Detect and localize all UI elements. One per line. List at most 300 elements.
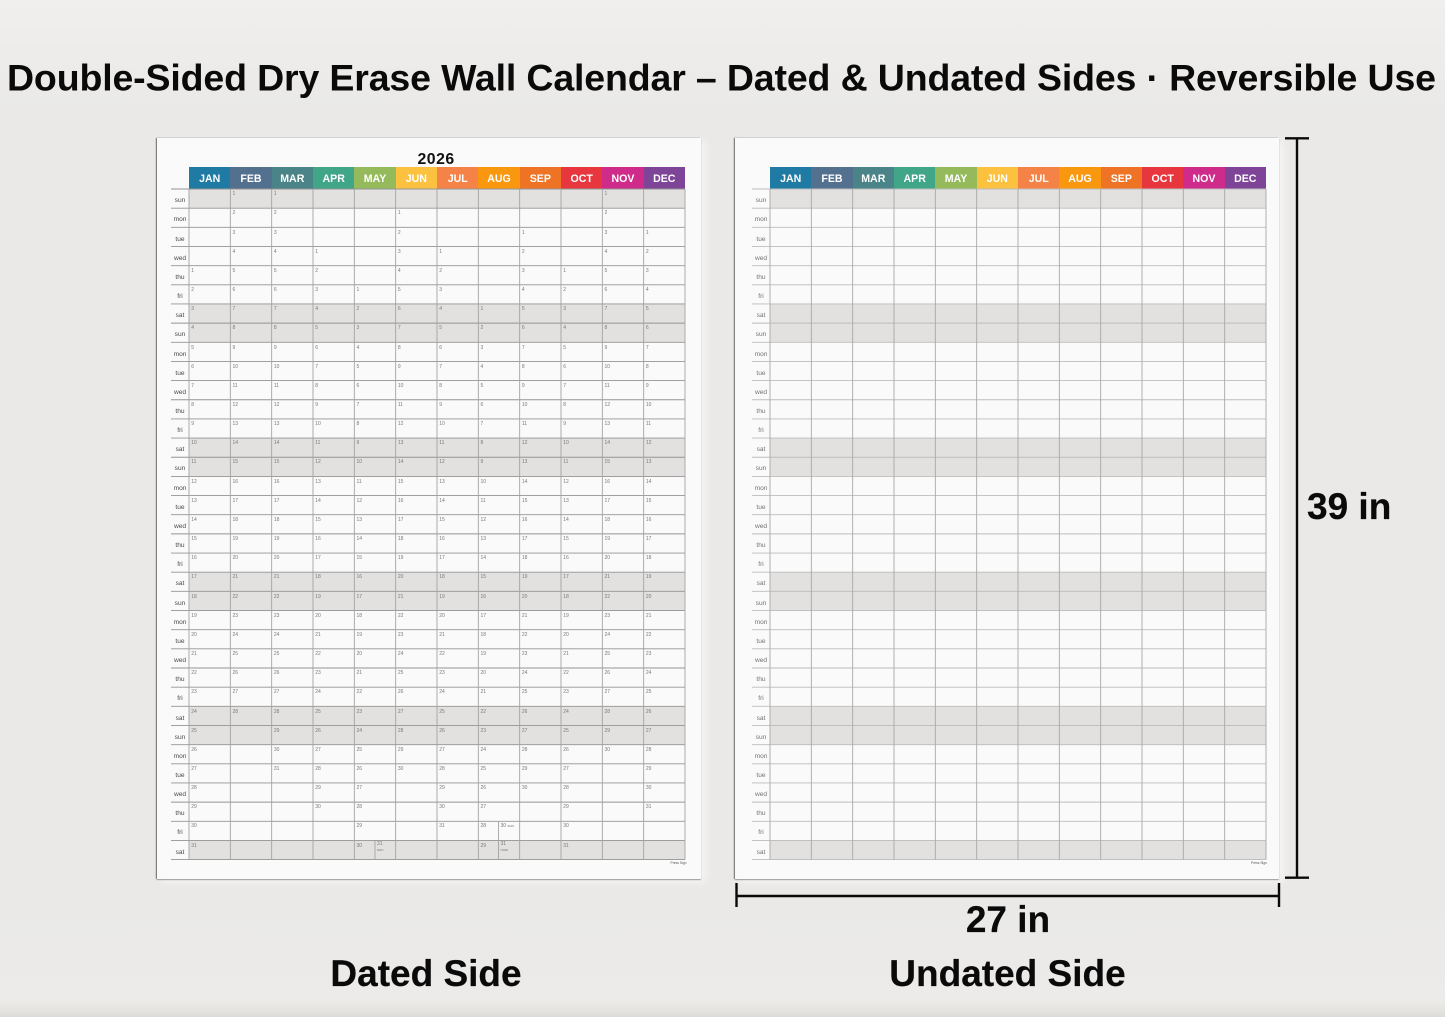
weekday labels: thu: [756, 542, 766, 549]
dates: March: 7: [274, 306, 277, 312]
caption: undated side: Undated Side: [889, 953, 1126, 994]
dates: August: 23: [481, 728, 486, 734]
weekday labels: wed: [755, 389, 767, 396]
weekday labels: sat: [757, 849, 765, 856]
dates: March: 26: [274, 670, 279, 676]
dates: April: 27: [315, 747, 321, 753]
dates: November: 21: [605, 574, 610, 580]
dates: January: 2: [191, 287, 194, 293]
weekday labels: sun: [756, 331, 766, 338]
dates: August: 27: [481, 804, 486, 810]
dates: December: 14: [646, 479, 651, 485]
panel: dated side calendar: [156, 138, 700, 879]
dates: February: 20: [233, 555, 238, 561]
dates: January: 14: [191, 517, 197, 523]
dates: July: 31: [439, 823, 445, 829]
dates: November: 12: [605, 402, 610, 408]
dates: October: 30: [563, 823, 569, 829]
dates: March: 8: [274, 325, 277, 331]
weekday labels: wed: [755, 657, 767, 664]
dates: October: 22: [563, 670, 569, 676]
dates: August: 9: [481, 459, 483, 465]
dates: February: 23: [233, 613, 238, 619]
dates: May: 16: [357, 574, 362, 580]
weekday labels: sat: [757, 312, 765, 319]
dates: May: 14: [357, 536, 362, 542]
dates: August: 22: [481, 709, 486, 715]
dates: May: 21: [357, 670, 362, 676]
dates: November: 3: [605, 230, 607, 236]
dates: July: 21: [439, 632, 445, 638]
dates: July: 9: [439, 402, 442, 408]
dates: July: 19: [439, 594, 445, 600]
dates: September: 5: [522, 306, 525, 312]
split date: August 31 mon: mon: [500, 847, 508, 852]
dates: September: 23: [522, 651, 527, 657]
dates: August: 20: [481, 670, 486, 676]
dates: March: 5: [274, 268, 277, 274]
dates: September: 2: [522, 249, 525, 255]
dates: October: 21: [563, 651, 569, 657]
dates: June: 9: [398, 364, 401, 370]
dates: April: 9: [315, 402, 318, 408]
dates: February: 25: [233, 651, 238, 657]
dates: June: 17: [398, 517, 403, 523]
weekday labels: tue: [756, 638, 766, 645]
dates: April: 5: [315, 325, 318, 331]
dates: August: 15: [481, 574, 486, 580]
dates: January: [191, 268, 197, 849]
dates: September: 15: [522, 498, 527, 504]
dates: July: 15: [439, 517, 445, 523]
dates: August: [480, 306, 486, 849]
dates: November: 25: [605, 651, 610, 657]
dates: June: 14: [398, 459, 403, 465]
dates: August: 7: [481, 421, 483, 427]
dates: August: 18: [481, 632, 486, 638]
dates: January: 17: [191, 574, 197, 580]
dates: February: 1: [233, 191, 235, 197]
dates: March: 10: [274, 364, 279, 370]
dates: May: 11: [357, 479, 362, 485]
dates: January: 18: [191, 594, 197, 600]
dates: July: 18: [439, 574, 445, 580]
dates: April: 15: [315, 517, 321, 523]
dates: August: 17: [481, 613, 486, 619]
year heading: 2026: [418, 150, 455, 168]
dates: April: 3: [315, 287, 318, 293]
dates: December: 1: [646, 230, 649, 236]
dates: September: 17: [522, 536, 527, 542]
weekday labels: fri: [177, 695, 183, 702]
dates: February: 12: [233, 402, 238, 408]
dates: February: 10: [233, 364, 238, 370]
dates: November: 15: [605, 459, 610, 465]
weekday labels: wed: [174, 523, 186, 530]
dates: March: 16: [274, 479, 279, 485]
dates: September: 10: [522, 402, 527, 408]
dates: June: 29: [398, 747, 403, 753]
dates: July: 25: [439, 709, 445, 715]
weekday labels: sun: [756, 734, 766, 741]
dates: October: 5: [563, 345, 566, 351]
dates: May: 7: [357, 402, 359, 408]
dates: October: 20: [563, 632, 569, 638]
dates: August: 6: [481, 402, 483, 408]
dates: November: 2: [605, 210, 607, 216]
weekday labels: [174, 197, 186, 856]
dates: November: 23: [605, 613, 610, 619]
dates: July: 12: [439, 459, 445, 465]
dates: September: 28: [522, 747, 527, 753]
dates: March: 22: [274, 594, 279, 600]
dates: July: 26: [439, 728, 445, 734]
calendar grid lines and weekend shading: [171, 188, 686, 860]
dates: August: 2: [481, 325, 483, 331]
dates: June: 2: [398, 230, 401, 236]
dates: February: 3: [233, 230, 235, 236]
dates: October: 13: [563, 498, 569, 504]
weekday labels: sun: [175, 465, 185, 472]
weekday labels: tue: [756, 236, 766, 243]
dates: July: 1: [439, 249, 442, 255]
dates: July: 6: [439, 345, 442, 351]
dates: March: 3: [274, 230, 277, 236]
month header row: JUN: [987, 173, 1008, 185]
dates: February: 6: [233, 287, 235, 293]
weekday labels: mon: [174, 619, 186, 626]
dates: January: 25: [191, 728, 197, 734]
dates: June: 19: [398, 555, 403, 561]
dates: December: 24: [646, 670, 651, 676]
dates: November: 11: [605, 383, 610, 389]
dates: December: 31: [646, 804, 651, 810]
dates: February: 16: [233, 479, 238, 485]
dates: August: 3: [481, 345, 483, 351]
weekday labels: thu: [756, 408, 766, 415]
dates: July: 5: [439, 325, 442, 331]
caption: dated side: Dated Side: [330, 953, 522, 994]
weekday labels: fri: [758, 695, 764, 702]
month header row: MAY: [945, 173, 967, 185]
dates: April: 1: [315, 249, 318, 255]
dates: November: 19: [605, 536, 610, 542]
dates: May: 24: [357, 728, 362, 734]
split date: August 31 mon: [500, 841, 508, 852]
dates: April: 16: [315, 536, 321, 542]
dates: April: 21: [315, 632, 321, 638]
dates: March: 4: [274, 249, 277, 255]
dates: August: 16: [481, 594, 486, 600]
weekday labels: wed: [755, 523, 767, 530]
month header row: [770, 167, 1266, 188]
dates: October: 12: [563, 479, 569, 485]
dates: May: 29: [357, 823, 362, 829]
dates: February: 15: [233, 459, 238, 465]
dates: November: 29: [605, 728, 610, 734]
dates: December: 4: [646, 287, 649, 293]
dates: August: 10: [481, 479, 486, 485]
dates: December: 20: [646, 594, 651, 600]
weekday labels: mon: [174, 216, 186, 223]
dates: June: 23: [398, 632, 403, 638]
dates: March: 13: [274, 421, 279, 427]
weekday labels: mon: [174, 753, 186, 760]
weekday labels: mon: [755, 351, 767, 358]
dates: January: 28: [191, 785, 197, 791]
dates: September: 8: [522, 364, 525, 370]
dates: May: 22: [357, 689, 362, 695]
weekday labels: sat: [757, 715, 765, 722]
dates: August: 8: [481, 440, 483, 446]
dates: November: 5: [605, 268, 607, 274]
dates: July: 2: [439, 268, 442, 274]
dates: July: 22: [439, 651, 445, 657]
month header row: DEC: [1234, 173, 1256, 185]
dates: March: 29: [274, 728, 279, 734]
dates: August: 5: [481, 383, 483, 389]
arrow: width dimension bracket: [735, 883, 1280, 907]
dates: November: 4: [605, 249, 607, 255]
split date: August 30 sun: 30 sun: [500, 823, 514, 829]
dates: June: 18: [398, 536, 403, 542]
weekday labels: tue: [756, 504, 766, 511]
dates: March: 12: [274, 402, 279, 408]
dates: February: 26: [233, 670, 238, 676]
month header row: [189, 167, 685, 188]
month header row: JUL: [1029, 173, 1049, 185]
dates: May: 12: [357, 498, 362, 504]
dates: December: 30: [646, 785, 651, 791]
weekday labels: mon: [174, 351, 186, 358]
dates: December: 9: [646, 383, 649, 389]
dates: March: 20: [274, 555, 279, 561]
panel: undated side calendar: [735, 138, 1279, 879]
dates: September: 30: [522, 785, 527, 791]
dates: March: 31: [274, 766, 279, 772]
dates: July: 16: [439, 536, 445, 542]
month header row: OCT: [570, 173, 593, 185]
dates: January: 10: [191, 440, 197, 446]
month header row: AUG: [1068, 173, 1092, 185]
dates: April: 4: [315, 306, 318, 312]
dates: September: 18: [522, 555, 527, 561]
dates: March: 30: [274, 747, 279, 753]
dates: September: 21: [522, 613, 527, 619]
dates: December: 15: [646, 498, 651, 504]
dates: August: 29: [481, 843, 486, 849]
dates: February: 27: [233, 689, 238, 695]
month header row: FEB: [821, 173, 843, 185]
dates: May: 30: [357, 843, 362, 849]
dates: May: 19: [357, 632, 362, 638]
dates: April: 30: [315, 804, 321, 810]
weekday labels: wed: [174, 389, 186, 396]
dates: March: 6: [274, 287, 277, 293]
dates: January: 20: [191, 632, 197, 638]
dates: January: 15: [191, 536, 197, 542]
dates: April: 25: [315, 709, 321, 715]
dates: January: 12: [191, 479, 197, 485]
weekday labels: wed: [174, 657, 186, 664]
weekday labels: fri: [758, 293, 764, 300]
dates: August: 21: [481, 689, 486, 695]
dates: July: 13: [439, 479, 445, 485]
month header row: SEP: [530, 173, 551, 185]
dates: July: 7: [439, 364, 442, 370]
dates: April: 17: [315, 555, 321, 561]
weekday labels: [755, 197, 767, 856]
split date: August 31 mon: 31: [500, 841, 506, 847]
dates: June: 1: [398, 210, 401, 216]
dates: September: 16: [522, 517, 527, 523]
dates: February: 5: [233, 268, 235, 274]
weekday labels: fri: [177, 427, 183, 434]
dates: January: 26: [191, 747, 197, 753]
dates: September: 24: [522, 670, 527, 676]
dates: May: 10: [357, 459, 362, 465]
weekday labels: sat: [176, 312, 184, 319]
dates: August: 24: [481, 747, 486, 753]
dates: February: 17: [233, 498, 238, 504]
dates: February: 13: [233, 421, 238, 427]
dates: September: 6: [522, 325, 525, 331]
dates: March: 24: [274, 632, 279, 638]
weekday labels: tue: [175, 370, 185, 377]
dates: December: 8: [646, 364, 649, 370]
dates: December: 10: [646, 402, 651, 408]
weekday labels: thu: [756, 676, 766, 683]
dates: September: 13: [522, 459, 527, 465]
dates: April: 6: [315, 345, 318, 351]
weekday labels: thu: [175, 542, 185, 549]
dates: January: 27: [191, 766, 197, 772]
weekday labels: fri: [758, 561, 764, 568]
dates: November: 26: [605, 670, 610, 676]
weekday labels: tue: [756, 370, 766, 377]
weekday labels: wed: [755, 791, 767, 798]
dates: November: [604, 191, 610, 753]
month header row: APR: [904, 173, 926, 185]
dates: June: 27: [398, 709, 403, 715]
dates: January: 4: [191, 325, 194, 331]
width label: 27 in: [966, 899, 1050, 940]
split date: May 31 sun: sun: [377, 847, 383, 852]
dates: June: 4: [398, 268, 401, 274]
dates: July: 28: [439, 766, 445, 772]
dates: January: 6: [191, 364, 194, 370]
month header row: SEP: [1111, 173, 1132, 185]
month header row: AUG: [487, 173, 511, 185]
month header row: APR: [322, 173, 345, 185]
dates: July: [439, 249, 445, 829]
dates: April: 22: [315, 651, 321, 657]
dates: February: 28: [233, 709, 238, 715]
weekday labels: tue: [175, 772, 185, 779]
dates: February: 11: [233, 383, 238, 389]
dates: May: 1: [357, 287, 359, 293]
dates: March: [274, 191, 280, 772]
dates: December: 5: [646, 306, 649, 312]
dates: January: 7: [191, 383, 194, 389]
dates: April: 23: [315, 670, 321, 676]
weekday labels: wed: [174, 791, 186, 798]
dates: October: 17: [563, 574, 569, 580]
dates: March: 2: [274, 210, 277, 216]
dates: June: 30: [398, 766, 403, 772]
dates: June: 8: [398, 345, 401, 351]
dates: December: 6: [646, 325, 649, 331]
dates: December: 22: [646, 632, 651, 638]
dates: April: [315, 249, 321, 810]
dates: November: 9: [605, 345, 607, 351]
dates: September: 19: [522, 574, 527, 580]
dates: November: 1: [605, 191, 607, 197]
weekday labels: sun: [756, 197, 766, 204]
weekday labels: sun: [175, 331, 185, 338]
dates: February: 24: [233, 632, 238, 638]
dates: January: 31: [191, 843, 197, 849]
dates: May: 28: [357, 804, 362, 810]
dates: October: 26: [563, 747, 569, 753]
dates: February: 4: [233, 249, 235, 255]
dates: May: 9: [357, 440, 359, 446]
month header row: JAN: [780, 173, 801, 185]
dates: January: 9: [191, 421, 194, 427]
dates: October: 14: [563, 517, 569, 523]
weekday labels: fri: [177, 829, 183, 836]
dates: June: 12: [398, 421, 403, 427]
dates: June: 15: [398, 479, 403, 485]
dates: December: 27: [646, 728, 651, 734]
dates: May: 5: [357, 364, 359, 370]
weekday labels: mon: [755, 753, 767, 760]
dates: February: 8: [233, 325, 235, 331]
dates: June: [398, 210, 404, 772]
dates: June: 13: [398, 440, 403, 446]
dates: March: 23: [274, 613, 279, 619]
dates: May: 13: [357, 517, 362, 523]
month header row: JUL: [448, 173, 468, 185]
dates: September: 3: [522, 268, 525, 274]
weekday labels: mon: [755, 485, 767, 492]
dates: October: 8: [563, 402, 566, 408]
dates: April: 10: [315, 421, 321, 427]
dates: November: 30: [605, 747, 610, 753]
dates: January: 30: [191, 823, 197, 829]
brand note: Press Sign: [1251, 860, 1267, 864]
dates: October: 24: [563, 709, 569, 715]
dates: May: 6: [357, 383, 359, 389]
dates: December: 17: [646, 536, 651, 542]
month header row: DEC: [653, 173, 675, 185]
dates: September: 25: [522, 689, 527, 695]
dates: November: 20: [605, 555, 610, 561]
dates: April: 29: [315, 785, 321, 791]
dates: September: 1: [522, 230, 525, 236]
dates: January: 1: [191, 268, 194, 274]
weekday labels: tue: [175, 504, 185, 511]
dates: December: 21: [646, 613, 651, 619]
dates: January: 23: [191, 689, 197, 695]
weekday labels: wed: [174, 255, 186, 262]
dates: November: 13: [605, 421, 610, 427]
dates: February: 7: [233, 306, 235, 312]
dates: March: 9: [274, 345, 277, 351]
dates: July: 30: [439, 804, 445, 810]
month header row: MAR: [861, 173, 885, 185]
dates: January: 11: [191, 459, 196, 465]
